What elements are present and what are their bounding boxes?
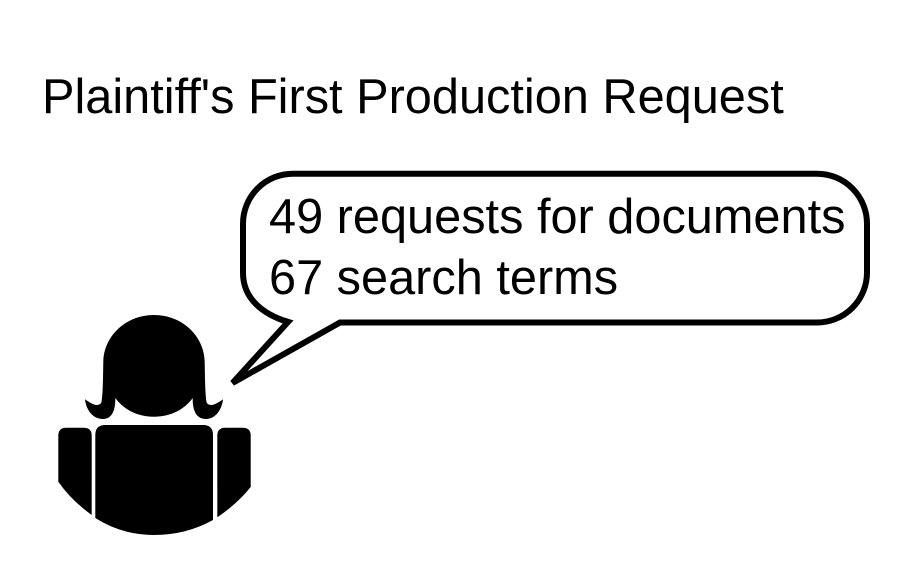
requests count: 49 requests for documents (269, 190, 845, 244)
speech bubble (232, 174, 867, 383)
centre book (95, 425, 213, 535)
icon: person reading (58, 315, 251, 535)
title: Plaintiff's First Production Request (42, 70, 784, 124)
right page (217, 428, 251, 517)
left page (58, 428, 92, 515)
hair and head (85, 315, 223, 419)
search terms count: 67 search terms (269, 251, 618, 305)
bubble text (269, 190, 845, 305)
